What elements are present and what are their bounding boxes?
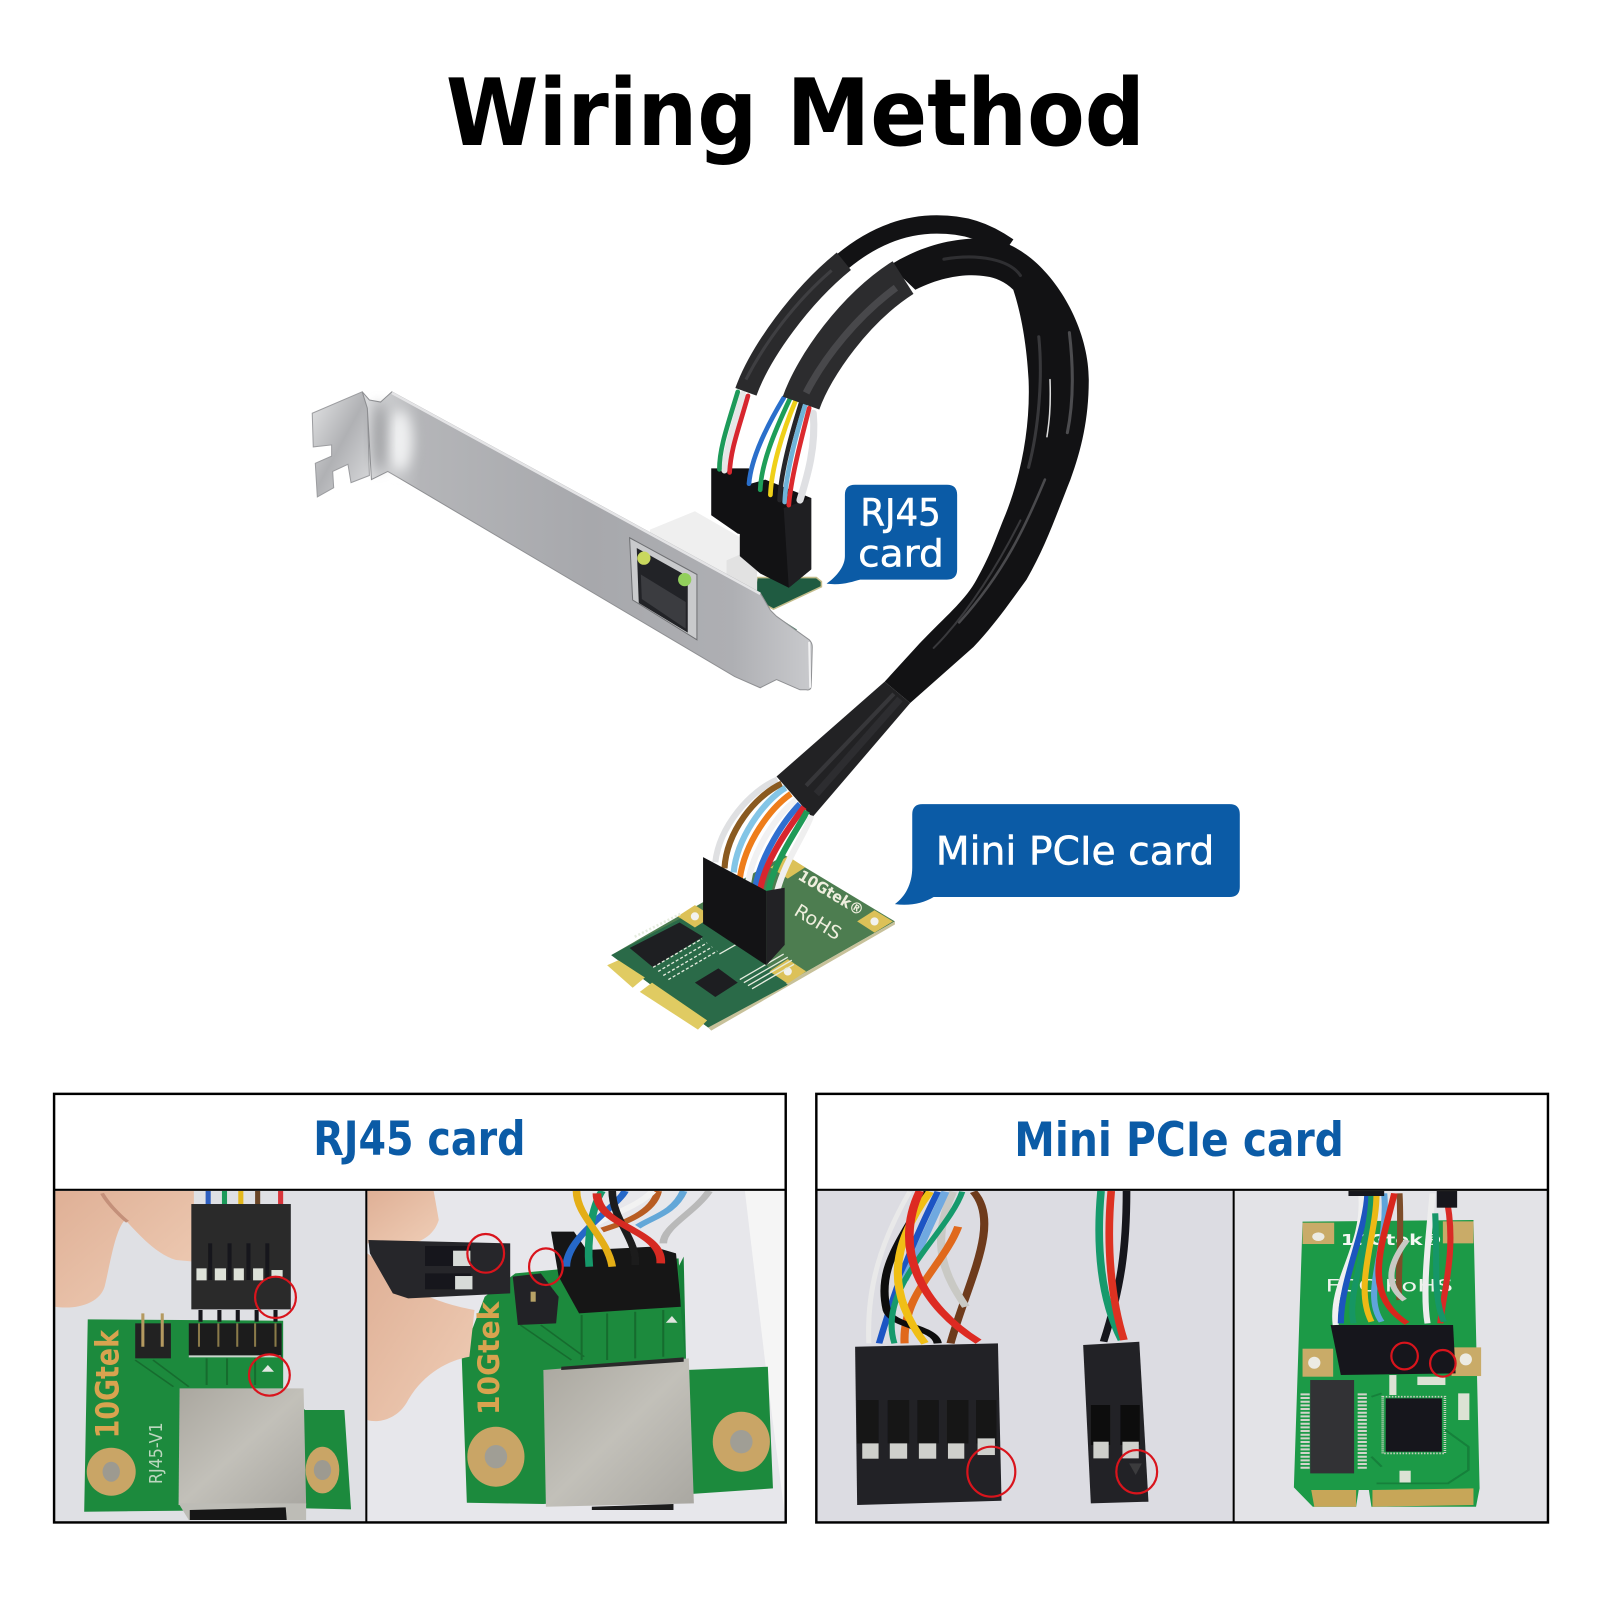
RJ45 metal body [179,1388,306,1505]
pads [1303,1221,1481,1377]
magnetics chip [1310,1380,1354,1473]
board [1294,1220,1480,1507]
five-pin connector [740,480,811,588]
callout: RJ45 card: RJ45 [860,491,941,535]
connector [191,1204,291,1309]
mini PCIe card board: RoHS [790,901,845,945]
four-pin connector [1083,1342,1148,1503]
held connector [368,1240,510,1298]
photo: RJ45 card, connector from above [55,1191,366,1522]
panel: RJ45 card [54,1094,786,1522]
RJ45 port [630,538,697,640]
pin headers [135,1323,171,1358]
PCB [462,1258,773,1504]
callout: Mini PCIe card: Mini PCIe card [936,829,1214,874]
photo: mini PCIe card: FCC RoHS [1326,1277,1453,1296]
wires on four-pin connector [1099,1191,1127,1342]
hand [367,1191,439,1243]
first black cable [843,224,1008,261]
coloured wires to RJ45 card [719,392,814,505]
red markers [467,1234,563,1285]
lower heat-shrink sleeve [777,682,910,817]
photo: connector close-ups [816,1191,1234,1522]
wires on ten-pin connector [869,1191,984,1343]
photo: RJ45 card, connector from above: RJ45-V1 [147,1422,167,1484]
board triangle mark [666,1316,678,1323]
five-pin connector on header [551,1232,681,1313]
wires [1335,1193,1450,1325]
board triangle mark [262,1365,274,1372]
photo: RJ45 card, connector from side [367,1191,786,1522]
wires [208,1191,281,1205]
card silkscreen text: 10Gtek® [795,867,867,920]
heading: RJ45 card: RJ45 card [313,1112,526,1167]
small PCB behind bracket [753,578,821,609]
panel: Mini PCIe card [816,1094,1548,1522]
red markers [967,1447,1157,1497]
mounting rings [467,1427,524,1487]
silkscreen: 10Gtek: 10Gtek [90,1329,127,1438]
metal bracket [312,392,812,690]
callout: Mini PCIe card [895,804,1240,905]
panel frame [816,1094,1548,1522]
pin header [513,1273,559,1325]
silkscreen: 10Gtek: 10Gtek [472,1300,506,1415]
ten-pin connector [855,1343,1002,1505]
title: Wiring Method [446,59,1145,167]
panel frame [54,1094,786,1522]
component detail [635,913,794,989]
gold mounting pads [678,856,893,984]
two-pin connector [711,468,749,536]
PCB [84,1319,351,1512]
silkscreen: 10Gtek® [1341,1231,1443,1249]
white RJ45 module [650,511,757,604]
gold edge fingers [607,960,707,1030]
heading: Mini PCIe card: Mini PCIe card [1014,1113,1344,1168]
wires [566,1191,709,1267]
wires to mini PCIe connector [715,780,811,894]
cable bundle [885,239,1089,703]
photo: mini PCIe card [1235,1191,1547,1522]
RJ45 metal body [543,1358,694,1507]
small components [1389,1375,1469,1484]
product image: RJ45 bracket card with cable [312,224,1089,1031]
mini PCIe card board [607,855,895,1031]
red markers [1391,1343,1456,1377]
mounting rings [87,1448,136,1496]
red markers [249,1277,296,1396]
LED indicators [637,552,691,586]
chips [630,922,738,997]
hand [55,1191,194,1308]
mini PCIe connector [703,857,785,965]
callout: RJ45 card [827,485,957,584]
connector block [1331,1325,1456,1375]
controller chip [1386,1398,1442,1452]
upper heat-shrink sleeves [746,261,903,403]
callout: RJ45 card: card [858,531,944,575]
gold edge [1311,1490,1356,1507]
